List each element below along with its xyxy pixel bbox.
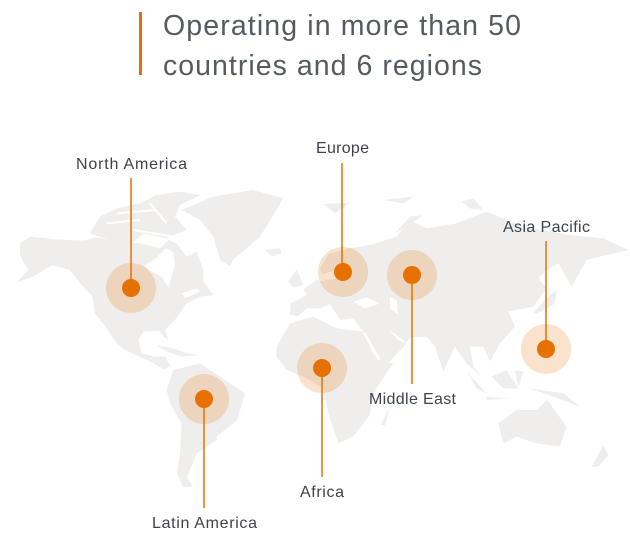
marker: Africa: Africa [300, 484, 344, 501]
map: Americas [17, 190, 283, 450]
marker: North America: North America [76, 156, 187, 173]
marker: Middle East [369, 250, 457, 408]
title: Operating in more than 50 [163, 10, 521, 42]
title: countries and 6 regions [163, 50, 482, 82]
marker: Asia Pacific [503, 219, 590, 374]
title [139, 10, 521, 82]
marker: Asia Pacific: Asia Pacific [503, 219, 590, 236]
marker: Europe: Europe [316, 140, 369, 157]
map: inland seas [320, 262, 407, 343]
map: South America south [177, 420, 217, 487]
world map [17, 190, 628, 487]
marker: Africa [297, 343, 347, 501]
marker: Latin America: Latin America [152, 515, 257, 532]
map: Eurasia, Africa and Oceania [270, 197, 628, 467]
map: Hudson Bay and Great Lakes [144, 248, 200, 298]
marker: Europe [316, 140, 369, 297]
marker: Latin America [152, 374, 257, 532]
map: Arctic channels [107, 203, 173, 237]
marker: Middle East: Middle East [369, 391, 457, 408]
map: Red Sea [364, 333, 379, 360]
marker: North America [76, 156, 187, 313]
